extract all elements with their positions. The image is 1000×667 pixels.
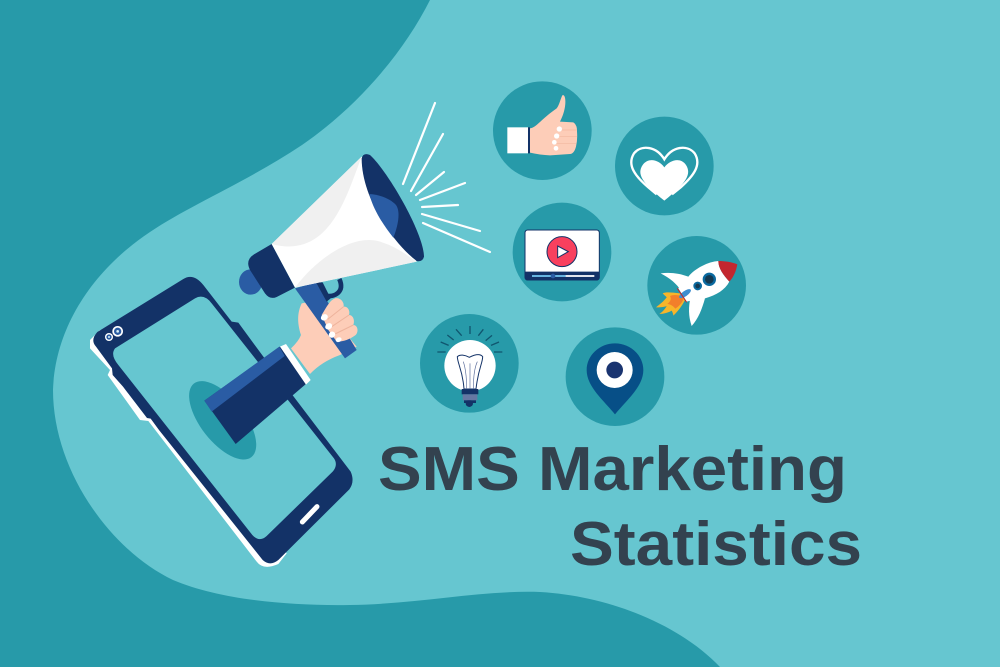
sleeve body [204, 347, 307, 444]
hand palm [291, 300, 357, 374]
sleeve cuff [280, 344, 311, 385]
icon: rocket [647, 236, 746, 335]
title line 2: Statistics [570, 510, 862, 579]
icon: megaphone and hand [239, 154, 424, 374]
fingers [320, 298, 358, 343]
phone body [93, 277, 353, 563]
sleeve [204, 344, 311, 444]
megaphone collar [248, 244, 295, 298]
icon: smartphone [90, 277, 353, 567]
megaphone handle loop [325, 279, 341, 296]
background: dark teal wave [0, 0, 720, 667]
title [378, 435, 862, 579]
megaphone handle [295, 282, 357, 358]
phone home button [302, 507, 317, 522]
title line 1: SMS Marketing [378, 435, 847, 504]
cone highlight bottom [295, 240, 417, 288]
sleeve stripe [204, 347, 285, 412]
megaphone mouth [362, 154, 424, 261]
hole in screen [177, 370, 269, 471]
icon: thumbs up [493, 81, 592, 180]
megaphone cone [272, 157, 417, 288]
megaphone knob [239, 269, 262, 295]
sound rays [403, 103, 490, 252]
icon: location pin [566, 327, 664, 426]
phone white edge [90, 330, 287, 567]
phone screen [113, 297, 336, 539]
icon: light bulb [420, 314, 519, 413]
icons group [420, 81, 746, 426]
icon: video player [513, 203, 611, 301]
phone cameras [105, 326, 123, 341]
cone highlight top [272, 157, 362, 246]
icon: heart [615, 117, 714, 215]
megaphone mouth inner [369, 194, 399, 238]
